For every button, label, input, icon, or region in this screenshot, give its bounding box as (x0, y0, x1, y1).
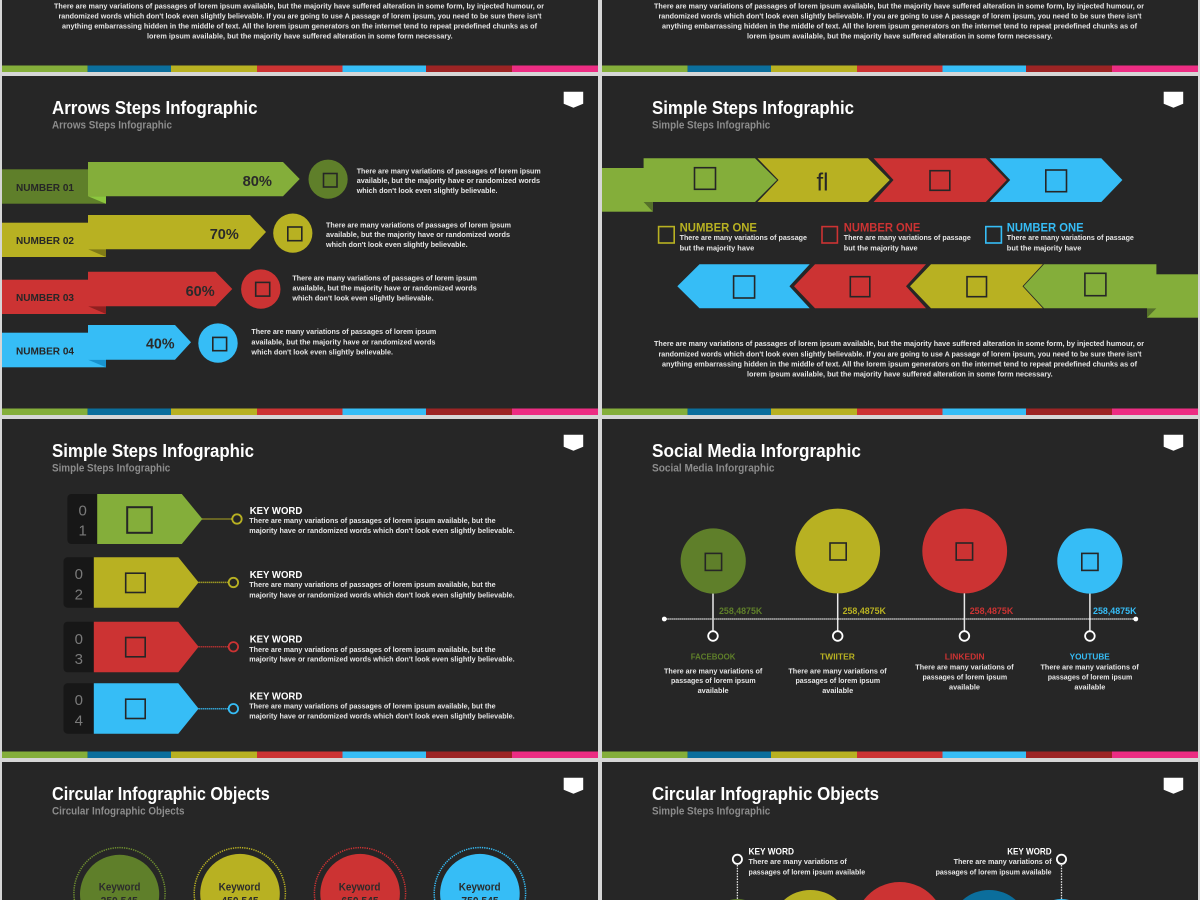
chevrons: bottom row (677, 264, 1198, 318)
panel: top right slide fragment (602, 0, 1198, 72)
title: Social Media Inforgraphic (652, 440, 861, 461)
circle: keyword 2: Keyword (219, 882, 260, 894)
colour bar (2, 66, 598, 72)
legend: item 3: There are many variations of passage (1007, 233, 1134, 242)
paragraph: anything embarrassing hidden in the middle of text. All the lorem ipsum generators on the internet tend to repeat predefined chunks as of (662, 360, 1137, 369)
legend: item 2: NUMBER ONE (844, 220, 920, 234)
text: key word 01: KEY WORD (250, 505, 303, 517)
item: twitter: available (822, 686, 853, 695)
item: linkedin: There are many variations of (915, 662, 1014, 671)
tag 03: 0 (75, 631, 83, 648)
paragraph: top right: There are many variations of passages of lorem ipsum available, but the majority have suffered alteration in some form, by injected humour, or (654, 2, 1144, 11)
text: row 01: which don't look even slightly believable. (356, 186, 498, 195)
callout: right (936, 846, 1066, 899)
item: facebook: available (698, 686, 729, 695)
text: row 01: There are many variations of passages of lorem ipsum (357, 166, 541, 175)
text: row 02 (325, 220, 511, 249)
text: key word 02: majority have or randomized words which don't look even slightly believable. (249, 590, 515, 599)
legend: item 1 (659, 220, 807, 252)
text: key word 03: There are many variations of passages of lorem ipsum available, but the (249, 645, 496, 654)
icon: badge (1164, 92, 1183, 108)
subtitle: Circular Infographic Objects (52, 806, 184, 818)
item: linkedin: available (949, 682, 980, 691)
text: key word 04: There are many variations of passages of lorem ipsum available, but the (249, 701, 496, 710)
item: twitter (788, 509, 887, 695)
title: Circular Infographic Objects (52, 783, 270, 804)
item: youtube (1040, 528, 1139, 691)
arrow: number 02 (2, 215, 266, 257)
subtitle: Simple Steps Infographic (52, 462, 170, 474)
legend: item 3: but the majority have (1007, 243, 1081, 252)
paragraph: There are many variations of passages of lorem ipsum available, but the majority have suffered alteration in some form, by injected humour, or (654, 339, 1144, 348)
colour bar (602, 752, 1198, 758)
text: key word 02 (249, 569, 515, 599)
text: key word 01 (249, 505, 515, 535)
paragraph: top left: anything embarrassing hidden in the middle of text. All the lorem ipsum generators on the internet tend to repeat predefined chunks as of (62, 22, 537, 31)
arrow: number 01: NUMBER 01 (16, 183, 74, 194)
icon: badge (564, 778, 583, 794)
icon: badge (564, 92, 583, 108)
tag 04: 4 (75, 712, 83, 730)
text: row 03: available, but the majority have or randomized words (292, 284, 477, 293)
subtitle: Social Media Inforgraphic (652, 462, 774, 474)
text: row 01: available, but the majority have or randomized words (357, 176, 540, 185)
tag 03 (64, 622, 199, 672)
icon: circle 02 (273, 214, 312, 253)
text: row 04: There are many variations of passages of lorem ipsum (251, 327, 437, 336)
item: linkedin: LINKEDIN (945, 652, 985, 662)
connector 02 (199, 578, 238, 587)
item: facebook (664, 528, 763, 695)
tag 01: 0 (79, 502, 87, 520)
item: youtube: 258,4875K (1093, 606, 1137, 616)
panel: top left slide fragment (2, 0, 598, 72)
callout: right: passages of lorem ipsum available (936, 868, 1052, 877)
arrow: number 04: 40% (146, 335, 174, 352)
tag 03: 3 (75, 651, 83, 668)
circle: keyword 1: Keyword (99, 882, 140, 894)
item: twitter: TWIITER (820, 652, 855, 662)
panel: circular infographic objects, callouts (602, 762, 1198, 900)
item: youtube: available (1074, 682, 1105, 691)
legend: item 1: There are many variations of passage (680, 233, 807, 242)
arrow: number 02: 70% (210, 226, 239, 243)
circle: keyword 1 (74, 848, 165, 900)
item: facebook: FACEBOOK (691, 652, 736, 662)
text: row 04: which don't look even slightly believable. (250, 348, 393, 357)
text: key word 01: majority have or randomized words which don't look even slightly believable. (249, 526, 515, 535)
legend: item 3: NUMBER ONE (1007, 220, 1084, 234)
paragraph: top left (54, 2, 544, 41)
circle: keyword 4 (434, 848, 526, 900)
icon: circle 04 (198, 323, 238, 363)
item: twitter: passages of lorem ipsum (796, 676, 880, 685)
text: key word 03: majority have or randomized words which don't look even slightly believable. (249, 654, 515, 663)
chevrons: top row (602, 158, 1122, 212)
chevrons: top row: fl (816, 168, 828, 196)
icon: badge (564, 435, 583, 451)
paragraph: top right: randomized words which don't look even slightly believable. If you are going to use A passage of lorem ipsum, you need to be sure there isn't (658, 12, 1142, 21)
callout: left: KEY WORD (748, 846, 794, 857)
panel: arrows steps infographic (2, 76, 598, 415)
text: key word 04: KEY WORD (250, 690, 303, 702)
item: twitter: 258,4875K (843, 606, 886, 616)
connector 03 (199, 642, 238, 652)
icon: circle 03 (241, 269, 280, 309)
callout: left: There are many variations of (748, 857, 847, 866)
text: key word 02: There are many variations of passages of lorem ipsum available, but the (249, 580, 496, 589)
text: key word 03 (249, 633, 515, 663)
colour bar (2, 752, 598, 758)
paragraph (654, 339, 1144, 378)
callout: right: KEY WORD (1007, 846, 1052, 857)
paragraph: top left: lorem ipsum available, but the majority have suffered alteration in some form necessary. (147, 32, 453, 41)
callout: left: passages of lorem ipsum available (748, 868, 865, 877)
item: linkedin (915, 509, 1014, 691)
connector 04 (199, 704, 238, 713)
icon: badge (1164, 778, 1183, 794)
icon: circle 01 (308, 160, 348, 199)
circle: keyword 3: Keyword (339, 882, 380, 894)
circle: keyword 3 (314, 848, 406, 900)
circle: keyword 4: Keyword (459, 882, 501, 894)
text: row 03 (291, 273, 477, 303)
callout: right: There are many variations of (954, 857, 1052, 866)
item: linkedin: 258,4875K (970, 606, 1014, 616)
panel: simple steps infographic, tags (2, 419, 598, 758)
timeline (662, 617, 1138, 621)
text: row 03: which don't look even slightly believable. (291, 294, 434, 303)
legend: item 1: but the majority have (680, 243, 754, 252)
tag 04 (64, 683, 199, 734)
item: youtube: YOUTUBE (1070, 652, 1110, 662)
arrow: number 01 (2, 162, 300, 204)
connector 01 (202, 514, 242, 524)
text: row 04 (250, 327, 437, 357)
text: row 01 (356, 166, 541, 195)
item: facebook: 258,4875K (719, 606, 763, 616)
tag 02: 0 (75, 566, 83, 583)
paragraph: lorem ipsum available, but the majority have suffered alteration in some form necessary. (747, 369, 1053, 378)
text: key word 04: majority have or randomized words which don't look even slightly believable. (249, 711, 515, 720)
item: youtube: There are many variations of (1040, 662, 1139, 671)
title: Simple Steps Infographic (652, 97, 854, 118)
arrow: number 01: 80% (243, 173, 272, 190)
paragraph: top left: randomized words which don't look even slightly believable. If you are going to use A passage of lorem ipsum, you need to be sure there isn't (58, 12, 542, 21)
arrow: number 04 (2, 325, 191, 367)
tag 01 (67, 494, 202, 544)
panel: circular infographic objects, keywords (2, 762, 598, 900)
text: row 02: which don't look even slightly believable. (325, 240, 468, 249)
text: row 02: available, but the majority have or randomized words (326, 230, 510, 239)
subtitle: Simple Steps Infographic (652, 806, 770, 818)
panel: social media infographic (602, 419, 1198, 758)
item: linkedin: passages of lorem ipsum (922, 673, 1007, 682)
legend: item 2: but the majority have (844, 243, 918, 252)
text: key word 03: KEY WORD (250, 633, 303, 645)
icon: badge (1164, 435, 1183, 451)
arrow: number 03: NUMBER 03 (16, 293, 74, 304)
text: row 02: There are many variations of passages of lorem ipsum (326, 220, 511, 229)
paragraph: top left: There are many variations of passages of lorem ipsum available, but the majority have suffered alteration in some form, by injected humour, or (54, 2, 544, 11)
circle: keyword 2 (194, 848, 285, 900)
text: key word 02: KEY WORD (250, 569, 303, 581)
title: Arrows Steps Infographic (52, 97, 258, 118)
legend: item 2 (822, 220, 971, 252)
paragraph: top right: anything embarrassing hidden in the middle of text. All the lorem ipsum generators on the internet tend to repeat predefined chunks as of (662, 22, 1137, 31)
text: key word 04 (249, 690, 515, 720)
circles: bottom row (730, 882, 1069, 900)
item: facebook: passages of lorem ipsum (671, 676, 756, 685)
tag 02: 2 (75, 586, 83, 604)
paragraph: randomized words which don't look even slightly believable. If you are going to use A passage of lorem ipsum, you need to be sure there isn't (658, 349, 1142, 358)
arrow: number 02: NUMBER 02 (16, 236, 74, 247)
title: Circular Infographic Objects (652, 783, 879, 804)
text: row 03: There are many variations of passages of lorem ipsum (292, 273, 477, 282)
subtitle: Arrows Steps Infographic (52, 120, 172, 132)
legend: item 1: NUMBER ONE (680, 220, 757, 234)
paragraph: top right (654, 2, 1144, 41)
panel: simple steps infographic, chevrons (602, 76, 1198, 415)
item: youtube: passages of lorem ipsum (1048, 673, 1133, 682)
tag 01: 1 (79, 522, 87, 540)
arrow: number 03 (2, 272, 232, 314)
tag 02 (64, 557, 199, 608)
legend: item 3 (986, 220, 1134, 252)
paragraph: top right: lorem ipsum available, but the majority have suffered alteration in some form necessary. (747, 32, 1053, 41)
text: key word 01: There are many variations of passages of lorem ipsum available, but the (249, 516, 496, 525)
callout: left (733, 846, 865, 899)
text: row 04: available, but the majority have or randomized words (251, 337, 436, 346)
arrow: number 03: 60% (186, 283, 215, 300)
tag 04: 0 (75, 692, 83, 709)
colour bar (2, 408, 598, 415)
colour bar (602, 408, 1198, 415)
item: facebook: There are many variations of (664, 666, 763, 675)
arrow: number 04: NUMBER 04 (16, 347, 74, 358)
colour bar (602, 66, 1198, 72)
subtitle: Simple Steps Infographic (652, 120, 770, 132)
legend: item 2: There are many variations of passage (844, 233, 971, 242)
title: Simple Steps Infographic (52, 440, 254, 461)
item: twitter: There are many variations of (788, 666, 887, 675)
